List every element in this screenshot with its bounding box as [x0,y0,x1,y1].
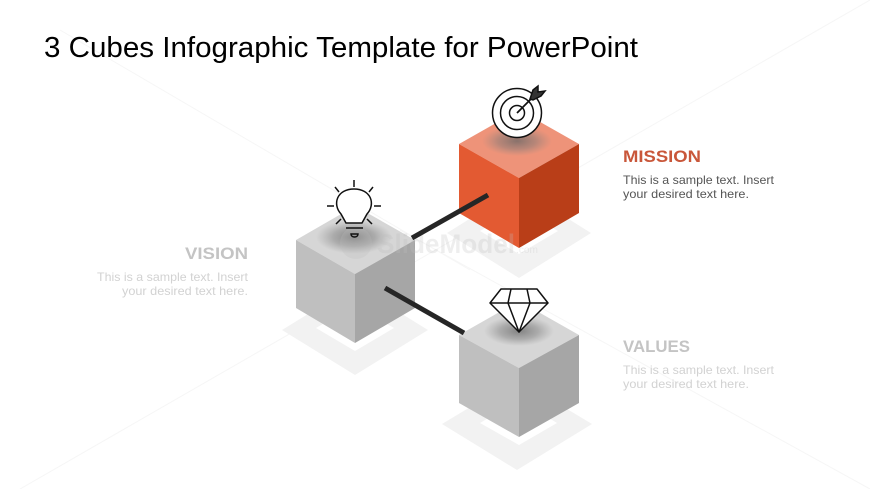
text block: values: This is a sample text. Insert [623,363,775,377]
text block: mission: This is a sample text. Insert [623,173,775,187]
text block: mission: MISSION [623,147,701,166]
text block: vision: VISION [185,244,248,263]
icon: light bulb [327,180,381,237]
title: 3 Cubes Infographic Template for PowerPoint [44,32,638,64]
cube: values [459,301,579,437]
text block: vision: This is a sample text. Insert [97,270,249,284]
text block: values [623,337,775,391]
floor shadow: values [442,379,592,470]
watermark: .com [516,245,538,256]
connector: vision to mission [412,195,488,238]
text block: mission [623,147,775,201]
text block: values: your desired text here. [623,377,749,391]
text block: vision [97,244,249,298]
cube: vision [296,206,415,343]
watermark: SlideModel [377,229,515,259]
text block: values: VALUES [623,337,690,356]
watermark [340,227,538,259]
text block: vision: your desired text here. [122,284,248,298]
text block: mission: your desired text here. [623,187,749,201]
cube: mission [459,110,579,248]
connector: vision to values [385,288,464,333]
floor shadow: vision [282,285,428,375]
floor shadow: mission [447,188,591,278]
icon: target [492,86,545,138]
icon: diamond [490,289,548,332]
